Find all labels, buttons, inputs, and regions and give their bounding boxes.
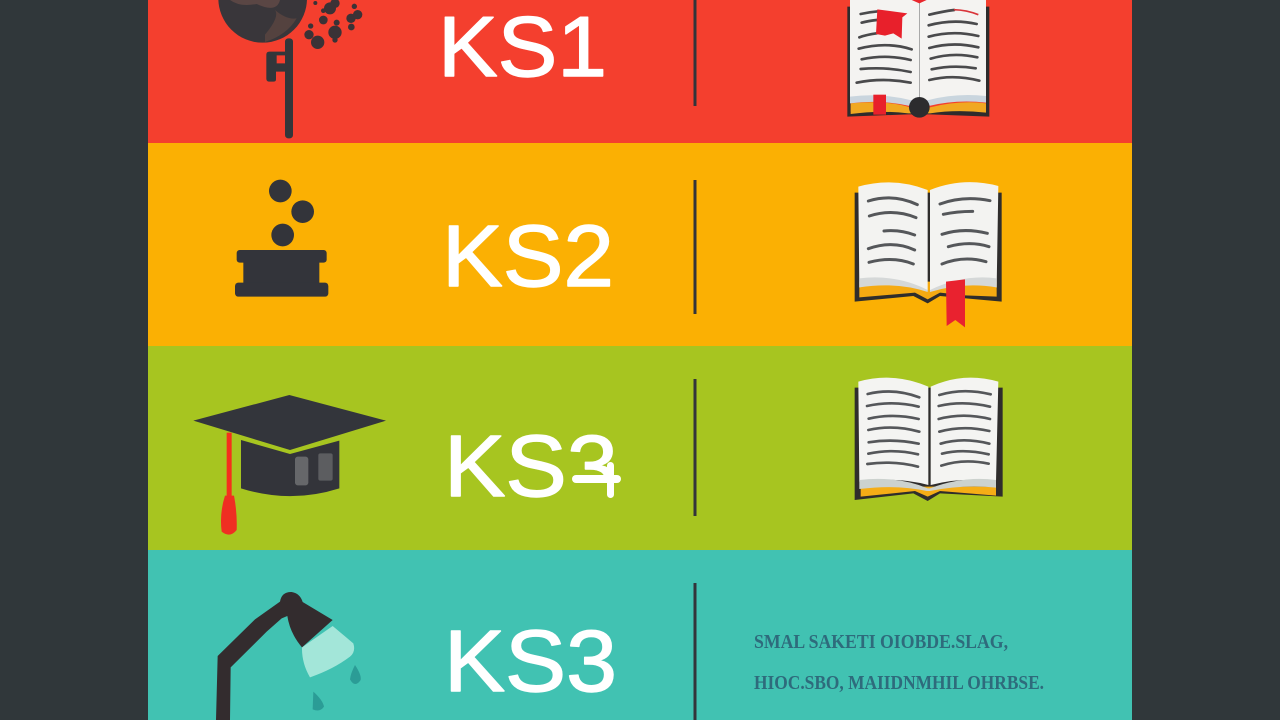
icon: desk lamp [216,592,361,720]
panel: KS3 row (green) [148,346,1132,550]
label: KS3: KS3 [444,613,617,710]
icon: graduation cap [193,395,386,535]
label: KS1: KS1 [438,0,607,95]
icon: globe on a stand [218,0,362,138]
text block: SMAL SAKETI OIOBDE.SLAG, [754,631,1008,653]
panel: KS3 row (teal) [148,550,1132,720]
text block: HIOC.SBO, MAIIDNMHIL OHRBSE. [754,672,1044,694]
label: KS2: KS2 [442,208,614,305]
divider: KS1 [694,0,696,106]
text block [754,631,1044,694]
label: KS3 with barred numeral: KS3 [444,418,618,515]
divider: KS3 teal [694,583,696,720]
icon: three dots above a box [235,180,328,297]
icon: open book with orange page edges [855,378,1003,501]
icon: open book with red bookmark [855,182,1002,327]
icon: open book with red bookmarks [847,0,989,118]
panel: KS1 row [148,0,1132,143]
divider: KS2 [694,180,696,314]
divider: KS3 [694,379,696,516]
panel: KS2 row [148,143,1132,346]
